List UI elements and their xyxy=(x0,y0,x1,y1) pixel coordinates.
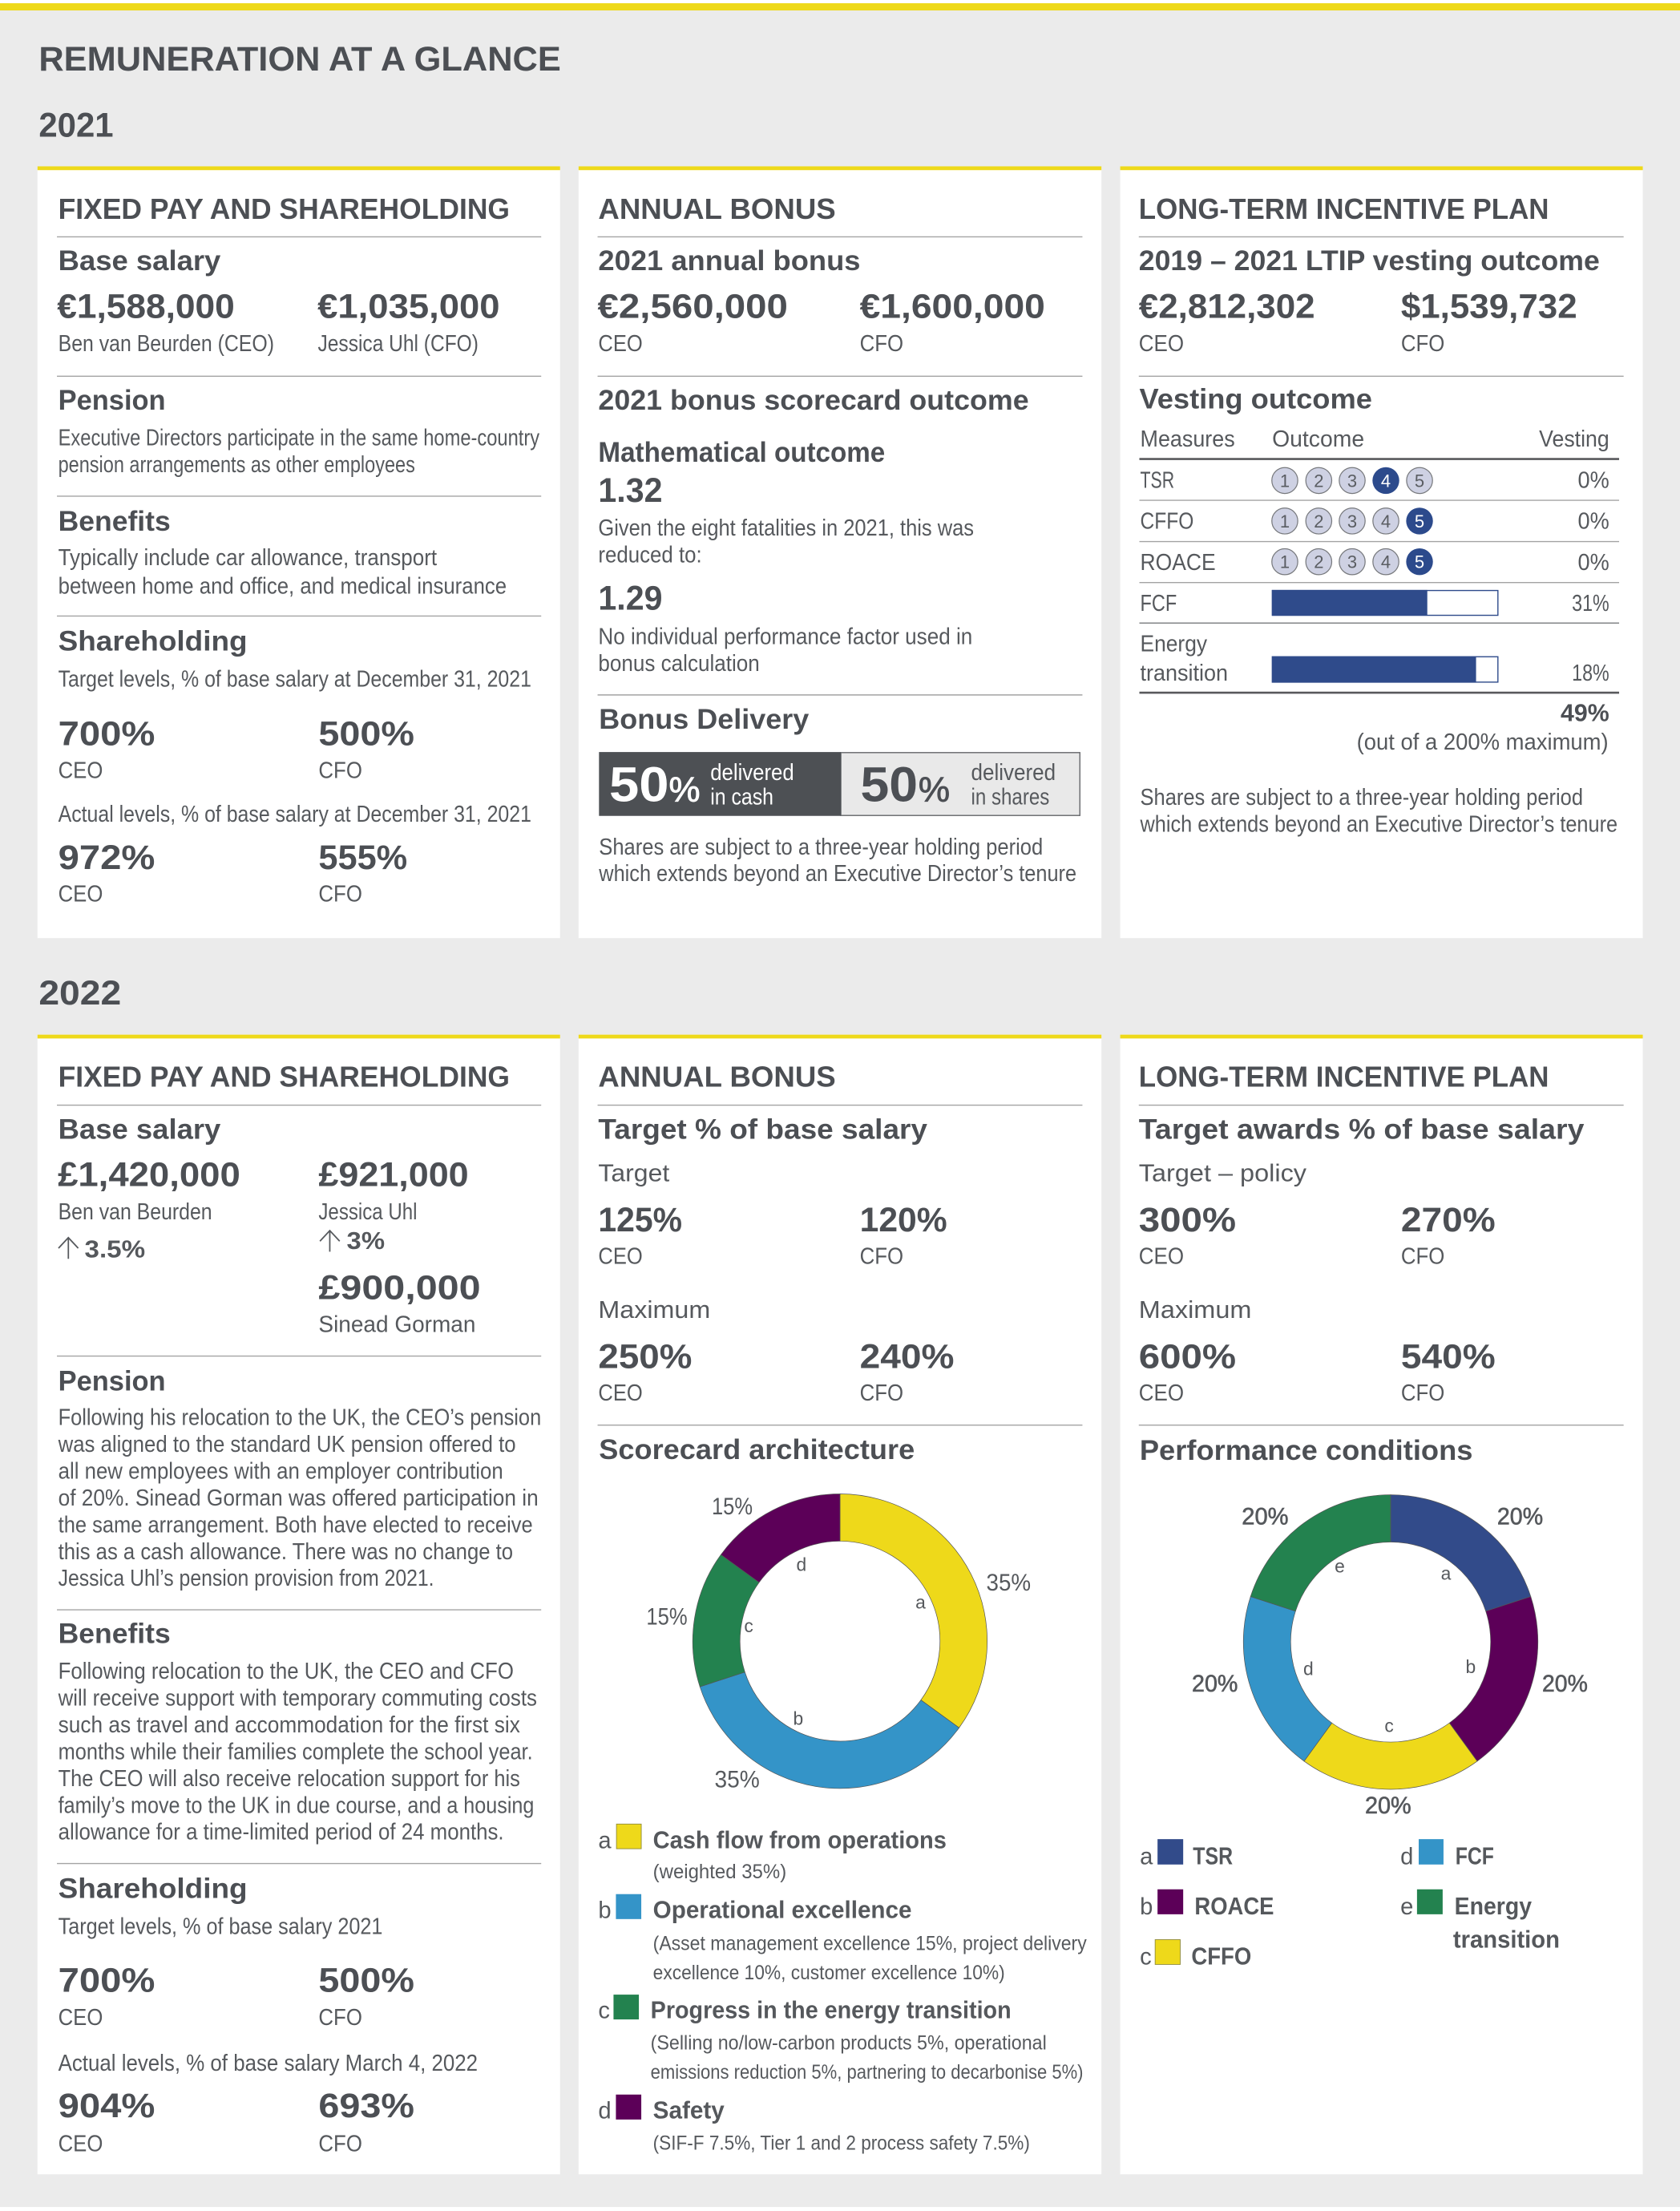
target awards percent of base salary: 600% xyxy=(1139,1337,1236,1375)
shareholding: Actual levels, % of base salary at December 31, 2021 xyxy=(59,802,531,827)
row: TSR: 4 xyxy=(1381,471,1391,491)
bonus delivery: % xyxy=(919,770,950,809)
pension: this as a cash allowance. There was no change to xyxy=(59,1539,513,1565)
bonus scorecard outcome: reduced to: xyxy=(598,543,702,568)
bonus delivery: in shares xyxy=(971,784,1049,810)
bonus scorecard outcome: 2021 bonus scorecard outcome xyxy=(598,385,1029,416)
legend item: operational excellence: (Asset management excellence 15%, project delivery xyxy=(653,1934,1087,1955)
2021 annual bonus amounts: CEO xyxy=(598,331,643,357)
donut chart: scorecard architecture: a xyxy=(915,1591,926,1612)
row: TSR: 0% xyxy=(1578,467,1609,493)
vesting total: 49% xyxy=(1561,699,1609,727)
legend item: energy transition: e xyxy=(1400,1894,1413,1920)
donut chart: scorecard architecture: 15% xyxy=(712,1494,753,1520)
bonus delivery: 50 xyxy=(609,757,669,812)
target awards percent of base salary: 270% xyxy=(1401,1201,1496,1239)
bonus delivery: Shares are subject to a three-year holding period xyxy=(599,835,1043,860)
heading: 2021: 2021 xyxy=(38,107,114,145)
shareholding: 972% xyxy=(59,839,155,876)
target percent of base salary xyxy=(598,1114,954,1406)
legend item: cash flow from operations: a xyxy=(598,1829,612,1854)
bonus scorecard outcome: Mathematical outcome xyxy=(598,437,885,468)
LTIP vesting outcome amounts: €2,812,302 xyxy=(1139,288,1315,325)
shareholding: CFO xyxy=(318,881,362,907)
donut chart: scorecard architecture: d xyxy=(796,1554,806,1574)
base salary: Jessica Uhl (CFO) xyxy=(318,331,479,357)
donut chart: scorecard architecture: c xyxy=(744,1615,753,1636)
2021 annual bonus amounts: €2,560,000 xyxy=(598,288,788,325)
2021 annual bonus amounts: CFO xyxy=(860,331,903,357)
holding period note: Shares are subject to a three-year holding period xyxy=(1141,785,1583,810)
heading: scorecard architecture: Scorecard architecture xyxy=(599,1434,915,1465)
row: CFFO xyxy=(1141,507,1609,535)
row: FCF: 31% xyxy=(1572,591,1609,616)
bonus delivery: delivered xyxy=(710,760,794,786)
base salary xyxy=(57,245,500,357)
target percent of base salary: 240% xyxy=(860,1337,954,1375)
base salary: £900,000 xyxy=(318,1268,481,1306)
vesting outcome table xyxy=(1139,383,1619,755)
target awards percent of base salary: CEO xyxy=(1139,1380,1184,1406)
legend item: ROACE xyxy=(1140,1890,1274,1920)
target percent of base salary: Maximum xyxy=(598,1295,710,1324)
row: ROACE: ROACE xyxy=(1141,550,1216,576)
donut chart: performance conditions: a xyxy=(1441,1563,1452,1584)
target percent of base salary: 125% xyxy=(598,1201,682,1239)
target awards percent of base salary: 540% xyxy=(1401,1337,1496,1375)
pension: of 20%. Sinead Gorman was offered participation in xyxy=(59,1485,539,1511)
legend item: safety: Safety xyxy=(653,2096,725,2124)
row: CFFO: 5 xyxy=(1415,511,1424,532)
target percent of base salary: Target % of base salary xyxy=(598,1114,927,1145)
benefits: will receive support with temporary commuting costs xyxy=(58,1686,537,1712)
base salary: €1,035,000 xyxy=(317,288,500,325)
row: CFFO: 1 xyxy=(1280,511,1290,532)
target percent of base salary: 250% xyxy=(598,1337,692,1375)
legend item: cash flow from operations xyxy=(598,1824,947,1883)
base salary: Sinead Gorman xyxy=(318,1312,475,1338)
shareholding: CEO xyxy=(59,2005,103,2031)
bonus delivery: Bonus Delivery xyxy=(599,704,810,735)
vesting outcome table: Outcome xyxy=(1272,426,1364,452)
row: ROACE: 5 xyxy=(1415,552,1424,572)
bonus scorecard outcome: 1.32 xyxy=(598,471,662,509)
target percent of base salary: Target xyxy=(598,1159,670,1187)
benefits: Typically include car allowance, transport xyxy=(59,545,437,571)
target percent of base salary: CEO xyxy=(598,1380,643,1406)
2021 annual bonus amounts: 2021 annual bonus xyxy=(598,245,860,277)
pension xyxy=(59,385,540,478)
pension: Executive Directors participate in the same home-country xyxy=(59,426,540,451)
benefits: allowance for a time-limited period of 24 months. xyxy=(59,1820,504,1845)
donut chart: performance conditions: 20% xyxy=(1542,1671,1588,1697)
shareholding: Shareholding xyxy=(59,625,248,657)
pension: Pension xyxy=(59,385,166,416)
panel: 2021 annual bonus xyxy=(579,166,1101,938)
base salary: £921,000 xyxy=(318,1156,469,1194)
target awards percent of base salary: CFO xyxy=(1401,1380,1444,1406)
legend item: FCF: FCF xyxy=(1456,1841,1494,1869)
shareholding: 904% xyxy=(59,2087,155,2124)
legend: scorecard architecture xyxy=(598,1824,1087,2155)
row: TSR: 1 xyxy=(1280,471,1290,491)
row: TSR: 3 xyxy=(1347,471,1357,491)
pension: was aligned to the standard UK pension offered to xyxy=(58,1432,516,1457)
shareholding: 500% xyxy=(318,1962,414,1999)
target percent of base salary: CFO xyxy=(860,1243,903,1269)
bonus delivery: 50 xyxy=(860,757,918,812)
benefits: Benefits xyxy=(59,506,171,537)
benefits: months while their families complete the school year. xyxy=(59,1739,533,1764)
row: ROACE: 2 xyxy=(1314,552,1323,572)
legend item: ROACE: ROACE xyxy=(1194,1892,1274,1920)
pension: the same arrangement. Both have elected to receive xyxy=(59,1512,533,1538)
legend item: progress in the energy transition: emissions reduction 5%, partnering to decarbonise 5%) xyxy=(651,2062,1083,2084)
legend item: TSR: a xyxy=(1140,1844,1153,1869)
legend item: operational excellence: b xyxy=(598,1898,612,1924)
donut chart: scorecard architecture: b xyxy=(793,1708,803,1728)
row: energy transition: transition xyxy=(1141,661,1228,686)
legend item: energy transition: Energy xyxy=(1455,1892,1533,1920)
icon: up arrow CEO xyxy=(59,1238,79,1259)
heading: 2022: 2022 xyxy=(38,974,121,1013)
holding period note xyxy=(1140,785,1617,837)
panel heading: FIXED PAY AND SHAREHOLDING xyxy=(59,193,510,225)
legend item: FCF xyxy=(1400,1839,1494,1869)
shareholding: CFO xyxy=(318,2005,362,2031)
base salary: €1,588,000 xyxy=(57,288,235,325)
base salary: £1,420,000 xyxy=(58,1156,240,1194)
shareholding: 693% xyxy=(318,2087,414,2124)
donut chart: performance conditions: 20% xyxy=(1497,1504,1543,1530)
legend item: safety xyxy=(598,2095,1030,2155)
target awards percent of base salary: CEO xyxy=(1139,1243,1184,1269)
panel heading: FIXED PAY AND SHAREHOLDING xyxy=(59,1061,510,1093)
row: CFFO: 4 xyxy=(1381,511,1391,532)
panel: 2022 long-term incentive plan xyxy=(1121,1035,1643,2174)
legend item: energy transition: transition xyxy=(1453,1926,1560,1954)
vesting outcome table: Vesting xyxy=(1539,426,1609,452)
benefits: between home and office, and medical insurance xyxy=(59,573,507,599)
pension: Jessica Uhl’s pension provision from 2021. xyxy=(59,1566,434,1591)
shareholding: Target levels, % of base salary at December 31, 2021 xyxy=(59,666,531,692)
row: energy transition: 18% xyxy=(1572,661,1609,686)
legend item: CFFO xyxy=(1140,1940,1251,1970)
LTIP vesting outcome amounts: CFO xyxy=(1401,331,1444,357)
bonus delivery xyxy=(598,704,1080,887)
legend item: TSR xyxy=(1140,1839,1233,1869)
shareholding: 500% xyxy=(318,714,414,752)
vesting total: (out of a 200% maximum) xyxy=(1357,730,1609,755)
row: CFFO: 2 xyxy=(1314,511,1323,532)
panel: 2022 fixed pay and shareholding xyxy=(38,1035,560,2174)
bonus delivery: % xyxy=(669,770,701,809)
base salary xyxy=(58,1114,481,1338)
LTIP vesting outcome amounts xyxy=(1139,245,1600,357)
row: CFFO: 0% xyxy=(1578,508,1609,534)
shareholding: CEO xyxy=(59,2131,103,2156)
row: ROACE: 4 xyxy=(1381,552,1391,572)
row: ROACE: 3 xyxy=(1347,552,1357,572)
legend item: CFFO: c xyxy=(1140,1944,1152,1970)
bonus scorecard outcome: No individual performance factor used in xyxy=(598,624,972,650)
target awards percent of base salary: Target – policy xyxy=(1139,1159,1307,1187)
base salary: Base salary xyxy=(59,1114,221,1145)
row: CFFO: 3 xyxy=(1347,511,1357,532)
panel heading: ANNUAL BONUS xyxy=(598,1061,836,1093)
benefits: The CEO will also receive relocation support for his xyxy=(59,1766,520,1792)
pension: all new employees with an employer contribution xyxy=(59,1459,503,1485)
base salary: Ben van Beurden xyxy=(59,1199,212,1225)
legend item: progress in the energy transition xyxy=(598,1995,1083,2084)
holding period note: which extends beyond an Executive Director’s tenure xyxy=(1140,811,1617,837)
vesting outcome table: Measures xyxy=(1141,426,1235,452)
target awards percent of base salary xyxy=(1139,1114,1585,1406)
bonus delivery: which extends beyond an Executive Director’s tenure xyxy=(598,861,1076,887)
row: FCF: FCF xyxy=(1141,591,1177,616)
legend item: operational excellence: Operational excellence xyxy=(653,1896,912,1924)
shareholding: CFO xyxy=(318,2131,362,2156)
benefits: family’s move to the UK in due course, and a housing xyxy=(59,1793,534,1818)
target percent of base salary: 120% xyxy=(860,1201,947,1239)
donut chart: performance conditions: d xyxy=(1303,1658,1314,1679)
benefits: such as travel and accommodation for the first six xyxy=(59,1712,520,1738)
vesting total xyxy=(1357,699,1609,755)
shareholding xyxy=(59,1873,478,2156)
legend item: TSR: TSR xyxy=(1193,1841,1233,1869)
legend item: progress in the energy transition: c xyxy=(598,1999,610,2024)
legend item: operational excellence xyxy=(598,1894,1087,1984)
base salary: Jessica Uhl xyxy=(318,1199,417,1225)
pension: pension arrangements as other employees xyxy=(59,452,415,478)
legend item: cash flow from operations: Cash flow from operations xyxy=(653,1826,947,1854)
row: energy transition xyxy=(1141,631,1609,686)
2021 annual bonus amounts xyxy=(598,245,1045,357)
donut chart: performance conditions: 20% xyxy=(1192,1671,1238,1697)
target awards percent of base salary: Target awards % of base salary xyxy=(1139,1114,1585,1145)
row: energy transition: Energy xyxy=(1141,631,1208,657)
donut chart: scorecard architecture xyxy=(646,1494,1031,1793)
legend item: progress in the energy transition: (Selling no/low-carbon products 5%, operational xyxy=(651,2033,1047,2055)
shareholding: Shareholding xyxy=(59,1873,248,1905)
shareholding: 555% xyxy=(318,839,407,876)
base salary: Base salary xyxy=(59,245,221,277)
pension: Pension xyxy=(59,1366,166,1397)
donut chart: performance conditions: e xyxy=(1335,1556,1345,1577)
panel heading: ANNUAL BONUS xyxy=(598,193,836,225)
target awards percent of base salary: 300% xyxy=(1139,1201,1236,1239)
vesting outcome table: Vesting outcome xyxy=(1139,383,1372,414)
base salary: 3.5% xyxy=(85,1235,145,1263)
bonus delivery: in cash xyxy=(710,784,773,810)
benefits xyxy=(59,506,507,599)
shareholding: Actual levels, % of base salary March 4, 2022 xyxy=(59,2051,478,2076)
shareholding: 700% xyxy=(59,1962,155,1999)
legend item: FCF: d xyxy=(1400,1844,1413,1869)
base salary: Ben van Beurden (CEO) xyxy=(59,331,274,357)
donut chart: performance conditions: 20% xyxy=(1242,1504,1289,1530)
donut chart: performance conditions: c xyxy=(1384,1715,1394,1736)
bonus scorecard outcome xyxy=(598,385,1029,677)
row: TSR: 5 xyxy=(1415,471,1424,491)
panel heading: LONG-TERM INCENTIVE PLAN xyxy=(1139,193,1549,225)
shareholding xyxy=(59,625,531,907)
bonus scorecard outcome: bonus calculation xyxy=(598,651,760,677)
row: TSR: 2 xyxy=(1314,471,1323,491)
pension xyxy=(58,1366,541,1591)
panel: 2022 annual bonus xyxy=(579,1035,1101,2174)
donut chart: performance conditions xyxy=(1192,1495,1588,1819)
panel: 2021 fixed pay and shareholding xyxy=(38,166,560,938)
donut chart: performance conditions: 20% xyxy=(1365,1793,1411,1819)
target awards percent of base salary: CFO xyxy=(1401,1243,1444,1269)
shareholding: CEO xyxy=(59,758,103,784)
LTIP vesting outcome amounts: CEO xyxy=(1139,331,1184,357)
bonus scorecard outcome: Given the eight fatalities in 2021, this was xyxy=(598,515,974,541)
shareholding: CEO xyxy=(59,881,103,907)
legend item: safety: d xyxy=(598,2098,612,2124)
row: CFFO: CFFO xyxy=(1141,508,1193,534)
bonus scorecard outcome: 1.29 xyxy=(598,579,662,616)
row: ROACE: 0% xyxy=(1578,550,1609,576)
2021 annual bonus amounts: €1,600,000 xyxy=(860,288,1045,325)
benefits: Benefits xyxy=(59,1618,171,1649)
donut chart: scorecard architecture: 35% xyxy=(987,1570,1031,1596)
shareholding: CFO xyxy=(318,758,362,784)
panel heading: LONG-TERM INCENTIVE PLAN xyxy=(1139,1061,1549,1093)
donut chart: scorecard architecture: 35% xyxy=(715,1768,760,1793)
donut chart: performance conditions: b xyxy=(1466,1656,1476,1677)
row: ROACE: 1 xyxy=(1280,552,1290,572)
legend item: ROACE: b xyxy=(1140,1894,1153,1920)
shareholding: Target levels, % of base salary 2021 xyxy=(59,1914,382,1939)
LTIP vesting outcome amounts: 2019 – 2021 LTIP vesting outcome xyxy=(1139,245,1600,277)
legend item: safety: (SIF-F 7.5%, Tier 1 and 2 process safety 7.5%) xyxy=(653,2133,1030,2155)
legend item: CFFO: CFFO xyxy=(1191,1942,1251,1970)
icon: up arrow CFO xyxy=(320,1231,340,1251)
donut chart: scorecard architecture: 15% xyxy=(646,1605,688,1631)
legend item: energy transition xyxy=(1400,1890,1560,1954)
base salary: 3% xyxy=(347,1227,385,1255)
legend item: operational excellence: excellence 10%, customer excellence 10%) xyxy=(653,1962,1005,1984)
row: TSR: TSR xyxy=(1141,467,1174,493)
bonus delivery: delivered xyxy=(971,760,1056,786)
benefits: Following relocation to the UK, the CEO and CFO xyxy=(59,1659,514,1684)
shareholding: 700% xyxy=(59,714,155,752)
pension: Following his relocation to the UK, the CEO’s pension xyxy=(59,1405,541,1431)
legend: performance conditions xyxy=(1140,1839,1560,1970)
legend item: cash flow from operations: (weighted 35%) xyxy=(653,1861,786,1883)
LTIP vesting outcome amounts: $1,539,732 xyxy=(1401,288,1577,325)
heading: performance conditions: Performance conditions xyxy=(1140,1435,1473,1466)
benefits xyxy=(58,1618,537,1845)
row: FCF xyxy=(1141,590,1609,616)
row: ROACE xyxy=(1141,548,1609,576)
target percent of base salary: CFO xyxy=(860,1380,903,1406)
panel: 2021 long-term incentive plan xyxy=(1121,166,1643,938)
legend item: progress in the energy transition: Progress in the energy transition xyxy=(651,1996,1012,2024)
row: TSR xyxy=(1141,467,1609,494)
target percent of base salary: CEO xyxy=(598,1243,643,1269)
target awards percent of base salary: Maximum xyxy=(1139,1295,1251,1324)
title: REMUNERATION AT A GLANCE xyxy=(38,40,561,79)
